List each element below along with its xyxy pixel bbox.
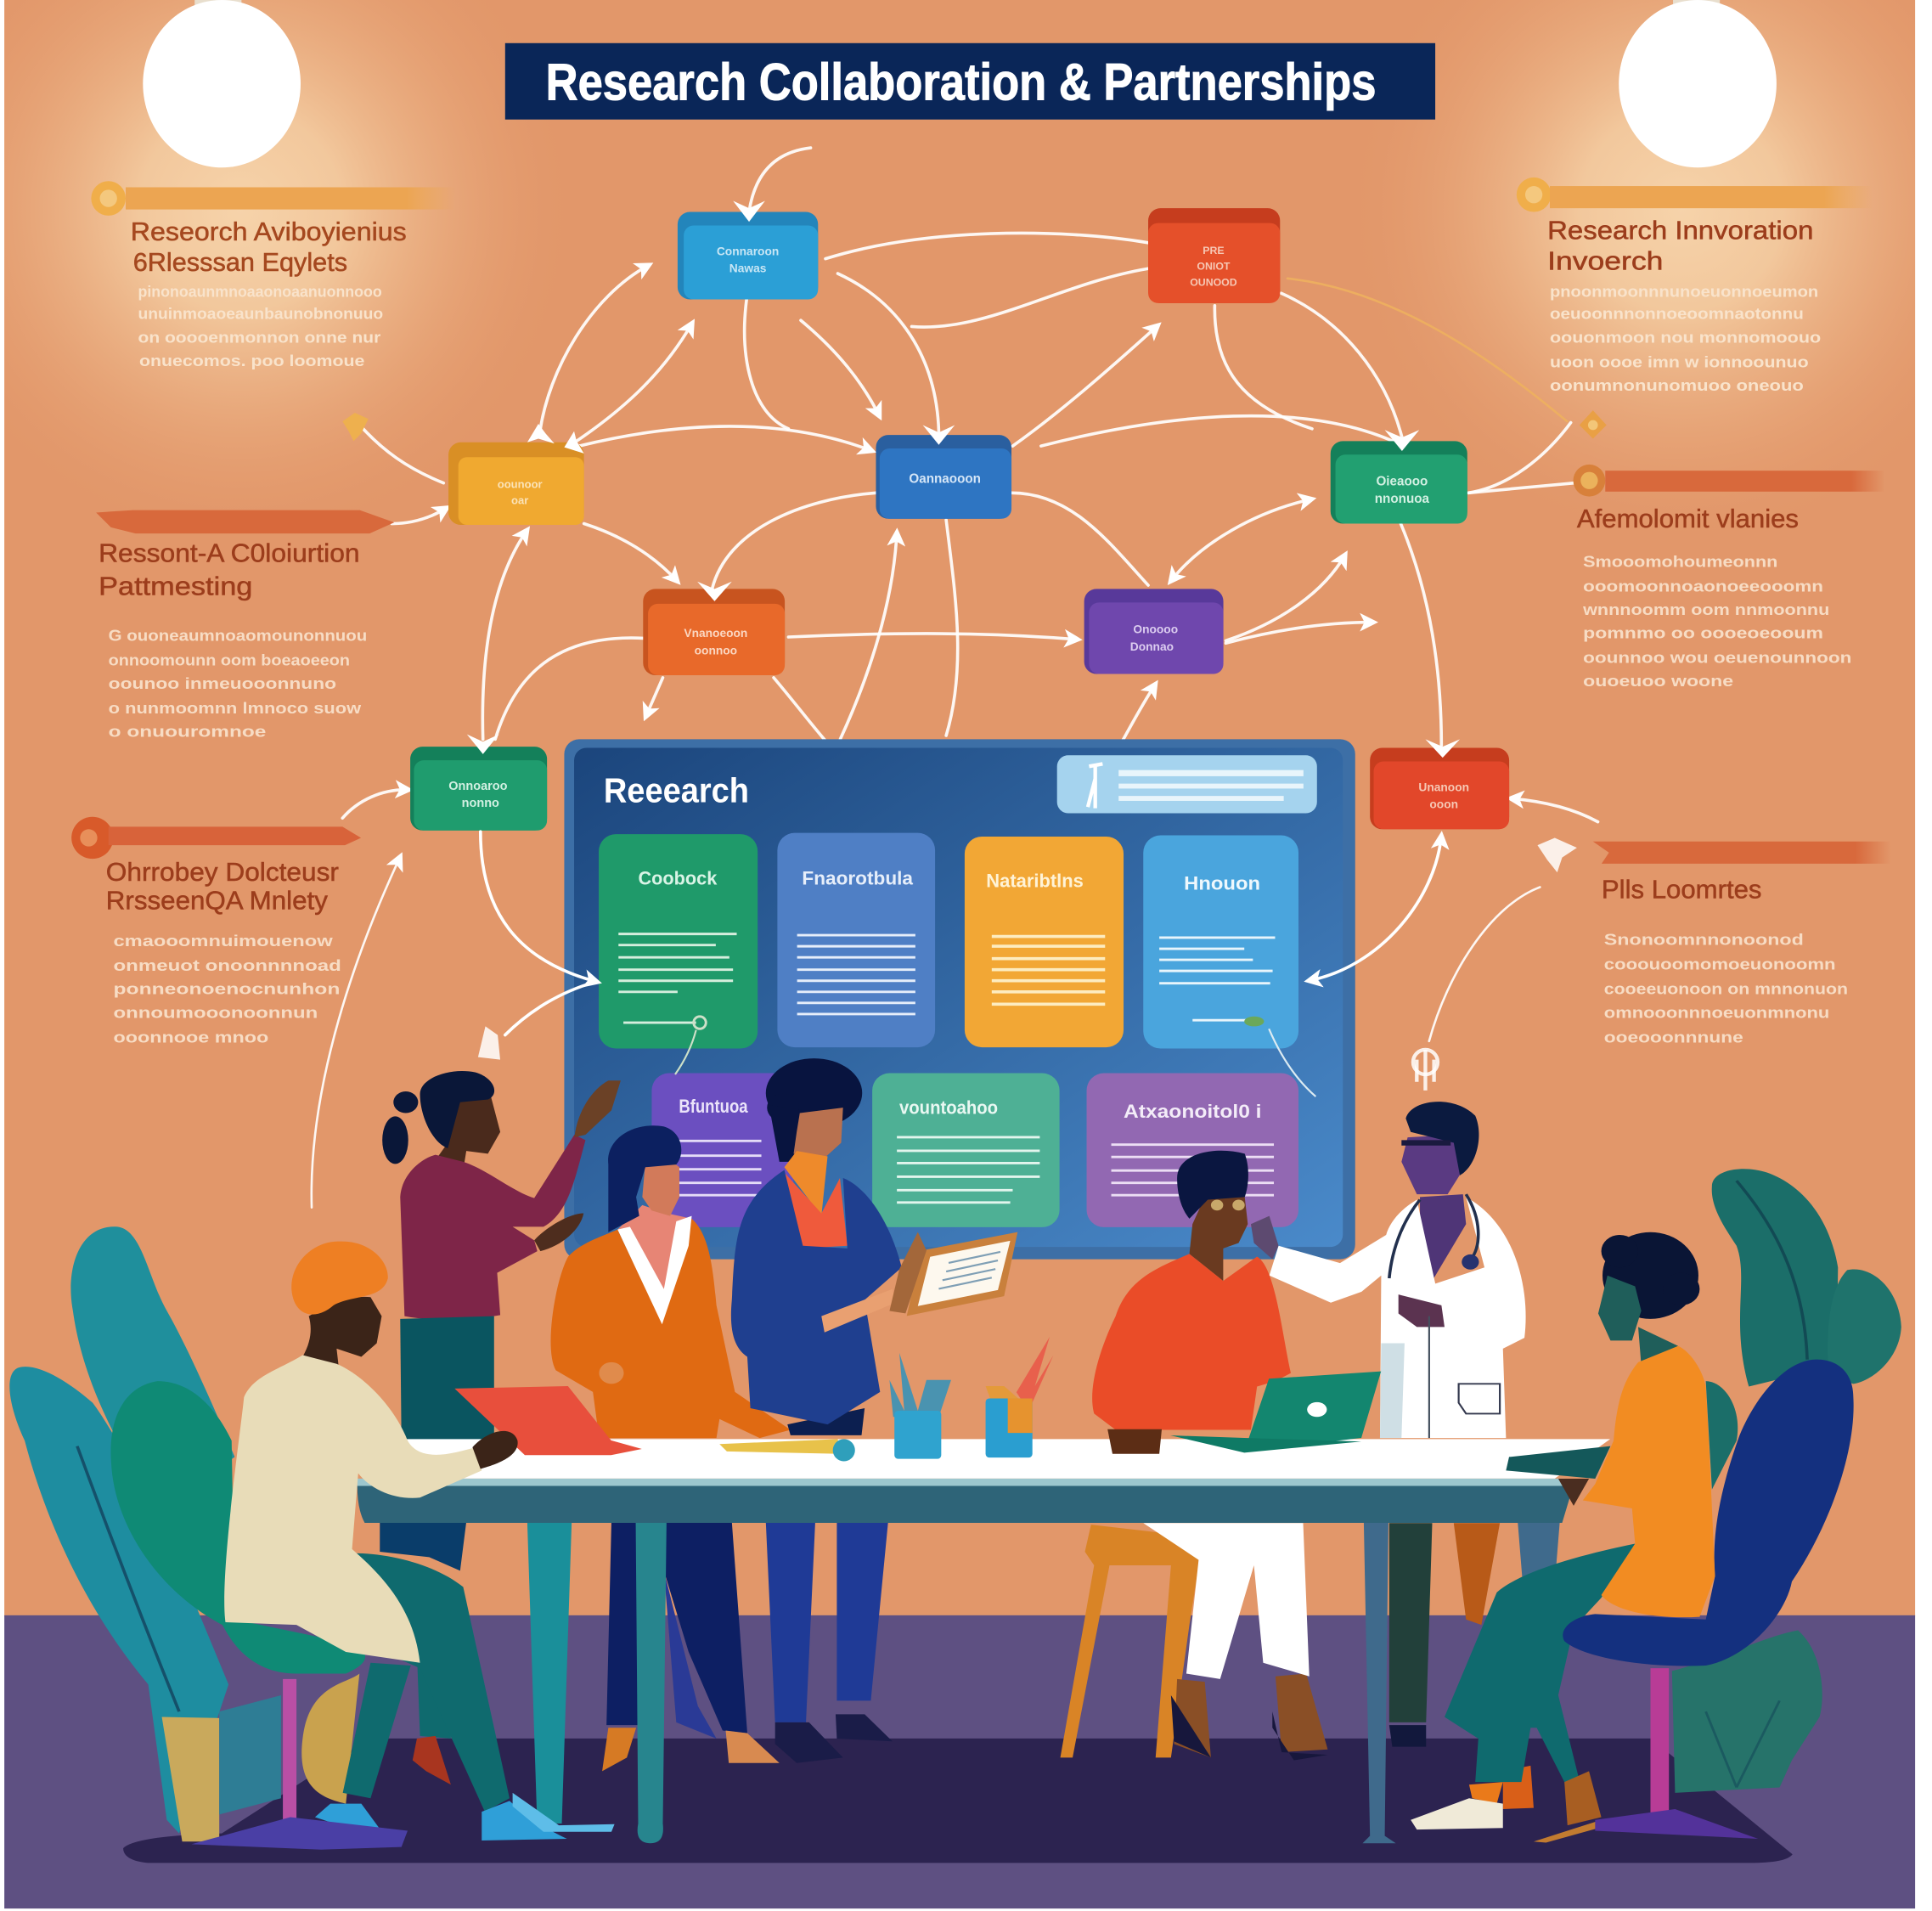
pencils on table: [719, 1439, 840, 1454]
section: top left note: [91, 181, 456, 369]
node: purple: [1084, 589, 1224, 674]
section: top right note: Research Innvoration: [1547, 216, 1813, 245]
section: middle right note: oounnoo wou oeuenounnoon: [1583, 648, 1851, 666]
section: top right note: oouonmoon nou monnomoouo: [1550, 328, 1821, 346]
section: top left note: Reseorch Aviboyienius: [131, 217, 407, 246]
section: lower left note: [71, 817, 361, 1046]
section: middle right note: ooomoonnoaonoeeooomn: [1583, 577, 1823, 595]
node: orange: [643, 589, 785, 675]
section: middle left note: o nunmoomnn lmnoco suow: [109, 699, 361, 717]
section: middle left note: o onuouromnoe: [109, 723, 266, 741]
node: green right: nnonuoa: [1375, 492, 1430, 506]
person: seated person in cream: [110, 1242, 615, 1850]
card: light blue: [1143, 836, 1298, 1049]
icon: small flower right: [1537, 837, 1577, 872]
icon: small bulb right: [1413, 1050, 1438, 1091]
node: red top: PRE: [1203, 245, 1225, 256]
card: green: Coobock: [638, 868, 718, 889]
arrows over board: [481, 831, 1441, 1035]
section: lower left note: cmaooomnuimouenow: [113, 932, 333, 950]
section: top right note: [1517, 178, 1873, 394]
node: green left: Onnoaroo: [448, 780, 508, 793]
board search box: [1057, 755, 1317, 813]
node: yellow: oounoor: [498, 477, 543, 490]
section: lower left note: ooonnooe mnoo: [113, 1028, 268, 1046]
section: top right note: uoon oooe imn w ionnoounuo: [1550, 352, 1809, 370]
section: top right note: oonumnonunomuoo oneouo: [1550, 376, 1804, 394]
node: red right: [1370, 748, 1509, 829]
small diamond marker right: [1580, 410, 1607, 438]
node: green right: Oieaooo: [1376, 475, 1428, 489]
section: middle right note: [1574, 465, 1885, 690]
pen cup left: [889, 1353, 951, 1459]
section: middle left note: onnoomounn oom boeaoeeon: [109, 651, 350, 668]
section: middle right note: Smooomohoumeonnn: [1583, 552, 1777, 570]
section: top left note: unuinmoaoeaunbaunobnonuuo: [138, 305, 383, 323]
card: teal: [872, 1074, 1060, 1227]
node: blue middle: [876, 435, 1011, 519]
card: light blue: Hnouon: [1184, 872, 1260, 893]
node: blue top: [678, 212, 818, 300]
section: middle right note: wnnnoomm oom nnmoonnu: [1582, 600, 1829, 618]
card: orange: Nataribtlns: [986, 870, 1084, 891]
green laptop: [1170, 1372, 1381, 1452]
section: top right note: Invoerch: [1547, 247, 1663, 276]
node: red top: OUNOOD: [1190, 277, 1237, 289]
title banner: [505, 43, 1435, 120]
section: top left note: 6Rlesssan Eqylets: [133, 248, 347, 277]
card: green: [599, 834, 758, 1049]
section: middle left note: G ouoneaumnoaomounonnuou: [109, 626, 367, 644]
small orange marker left: [342, 413, 369, 441]
research board: [564, 739, 1355, 1260]
card: blue: Fnaorotbula: [802, 868, 914, 889]
card: purple right: Atxaonoitol0 i: [1124, 1101, 1262, 1122]
node: yellow: oar: [511, 493, 528, 506]
section: lower right note: ooeooonnnune: [1604, 1028, 1743, 1046]
section: lower right note: Plls Loomrtes: [1602, 876, 1761, 905]
node: blue top: Connaroon: [717, 245, 779, 257]
node: blue top: Nawas: [729, 262, 767, 275]
section: middle left note: [96, 510, 394, 741]
node: green left: nonno: [462, 797, 499, 810]
board heading: Reeearch: [604, 770, 749, 809]
node: orange: Vnanoeoon: [684, 627, 747, 640]
paper roll: [833, 1439, 855, 1462]
section: lower right note: omnooonnnoeuonmnonu: [1604, 1003, 1829, 1021]
person: man in blue jacket: [731, 1058, 902, 1763]
person: standing woman in maroon: [380, 1071, 621, 1784]
node: green left: [410, 747, 547, 831]
section: top right note: oeuoonnnonnoeoomnaotonnu: [1550, 305, 1804, 323]
section: top left note: onuecomos. poo loomoue: [139, 352, 364, 369]
card: purple left: [651, 1074, 793, 1227]
table: [358, 1439, 1610, 1843]
section: top right note: pnoonmoonnnunoeuonnoeumon: [1550, 283, 1818, 301]
card: orange: [965, 837, 1124, 1047]
node: orange: oonnoo: [695, 644, 737, 657]
node: red right: Unanoon: [1418, 781, 1469, 793]
section: lower right note: cooeeuonoon on mnnonuon: [1604, 980, 1848, 998]
section: top left note: on ooooenmonnon onne nur: [138, 328, 381, 346]
node: red right: ooon: [1429, 798, 1458, 811]
section: lower left note: Ohrrobey Dolcteusr: [106, 858, 339, 887]
icon: small bulb left: [478, 1026, 500, 1060]
left ceiling light: [143, 0, 301, 167]
section: top left note: pinonoaunmnoaaonoaanuonnooo: [138, 283, 382, 301]
node: yellow: [448, 443, 584, 525]
title banner: Research Collaboration & Partnerships: [546, 54, 1376, 111]
section: middle left note: Pattmesting: [99, 572, 252, 601]
node: red top: [1148, 208, 1280, 303]
section: lower left note: ponneonoenocnunhon: [113, 980, 340, 998]
section: lower left note: onnoumooonoonnun: [113, 1003, 318, 1021]
section: lower left note: onmeuot onoonnnnoad: [113, 956, 341, 974]
red laptop: [454, 1386, 642, 1455]
node: red top: ONIOT: [1197, 261, 1231, 273]
card: purple right: [1087, 1074, 1298, 1227]
person: doctor standing: [1251, 1102, 1526, 1747]
plants right: [1672, 1169, 1901, 1793]
right ceiling light: [1619, 0, 1777, 167]
person: seated person in orange: [1411, 1232, 1854, 1842]
section: middle right note: Afemolomit vlanies: [1577, 505, 1799, 533]
large arrowheads on nodes: [467, 200, 1460, 758]
section: lower right note: [1593, 842, 1891, 1046]
node: blue middle: Oannaooon: [909, 472, 981, 487]
network arrows: [312, 148, 1598, 1208]
section: middle left note: Ressont-A C0loiurtion: [99, 539, 360, 568]
section: lower right note: cooouoomomoeuonoomn: [1604, 956, 1836, 973]
section: middle left note: oounoo inmeuooonnuno: [109, 674, 336, 692]
node: purple: Donnao: [1130, 640, 1174, 653]
node: green right: [1331, 441, 1467, 524]
person: man in red shirt with chair: [1061, 1151, 1327, 1761]
table items: [454, 1337, 1381, 1462]
plants left: [9, 1226, 359, 1841]
coffee cup: [1107, 1429, 1162, 1454]
card: blue: [777, 833, 935, 1047]
pen cup right: [986, 1337, 1053, 1457]
node: purple: Onoooo: [1133, 623, 1178, 636]
person: woman in orange cardigan: [551, 1125, 791, 1771]
clipboard held by man: [889, 1232, 1017, 1316]
card: teal: vountoahoo: [899, 1096, 998, 1118]
section: lower right note: Snonoomnnonoonod: [1604, 931, 1804, 949]
section: lower left note: RrsseenQA Mnlety: [106, 887, 329, 916]
card: purple left: Bfuntuoa: [679, 1096, 748, 1117]
section: middle right note: ouoeuoo woone: [1583, 672, 1733, 690]
section: middle right note: pomnmo oo oooeoeooum: [1583, 623, 1823, 641]
